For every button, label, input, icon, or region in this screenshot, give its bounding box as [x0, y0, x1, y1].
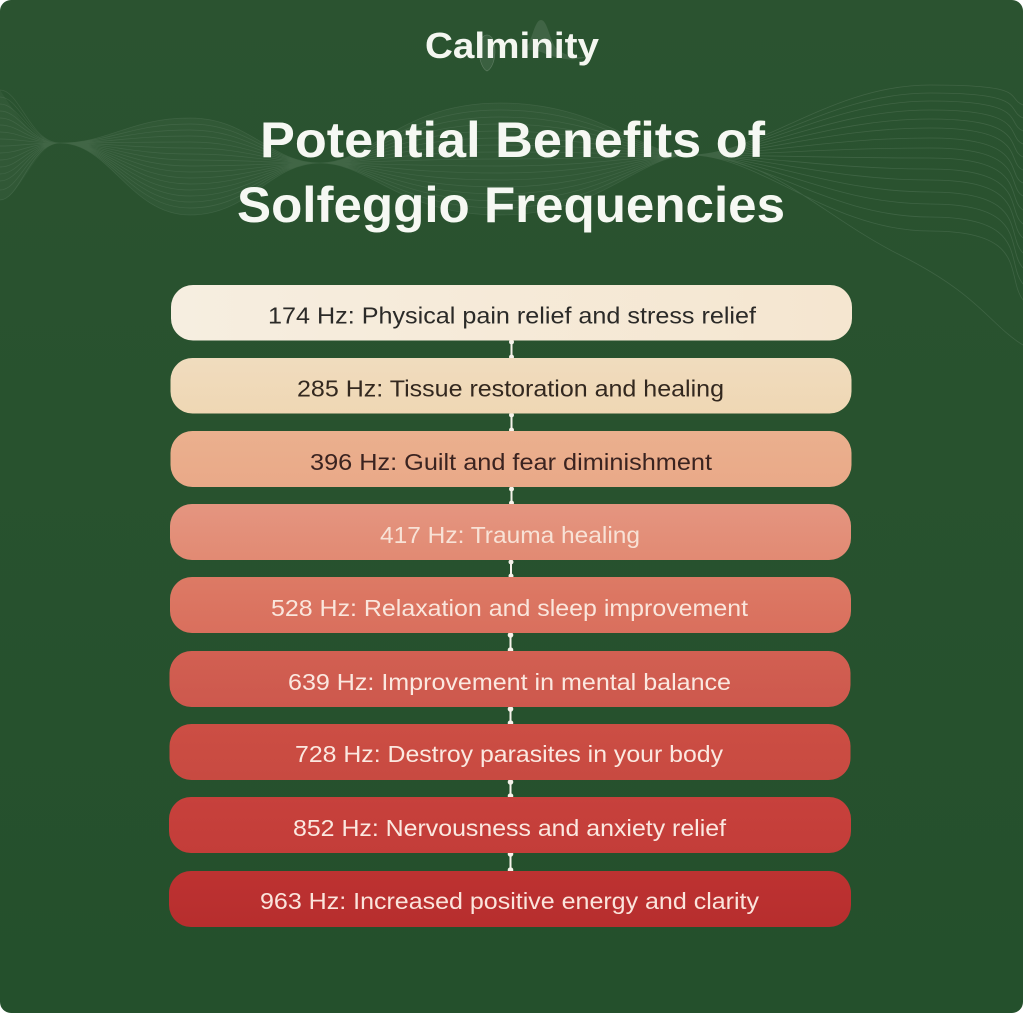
row: 174 Hz	[171, 285, 852, 340]
row: 528 Hz: 528 Hz: Relaxation and sleep improvement	[271, 595, 749, 621]
logo wave mark	[479, 20, 590, 71]
row: 639 Hz	[170, 651, 850, 707]
row: 728 Hz	[170, 724, 850, 780]
row: 285 Hz	[170, 358, 852, 414]
row: 285 Hz: 285 Hz: Tissue restoration and healing	[297, 376, 724, 402]
row: 396 Hz: 396 Hz: Guilt and fear diminishment	[310, 449, 713, 475]
row: 852 Hz: 852 Hz: Nervousness and anxiety relief	[293, 815, 727, 841]
row: 396 Hz	[170, 431, 852, 487]
wave pattern: left and centre ribbons	[0, 90, 690, 215]
row: 852 Hz	[169, 797, 851, 853]
row: 528 Hz	[170, 577, 851, 633]
row: 963 Hz: 963 Hz: Increased positive energy and clarity	[260, 888, 760, 914]
title: Solfeggio Frequencies	[237, 177, 785, 233]
row: 417 Hz	[170, 504, 851, 560]
title: Potential Benefits of	[260, 112, 765, 168]
wave pattern: right ribbon	[690, 85, 1023, 345]
row: 174 Hz: 174 Hz: Physical pain relief and stress relief	[268, 302, 757, 328]
connector line between rows	[508, 340, 514, 873]
row: 728 Hz: 728 Hz: Destroy parasites in your body	[295, 741, 724, 767]
logo wordmark: Calminity	[425, 25, 599, 66]
title	[237, 112, 785, 233]
row: 963 Hz	[169, 871, 851, 927]
row: 417 Hz: 417 Hz: Trauma healing	[380, 522, 640, 548]
row: 639 Hz: 639 Hz: Improvement in mental balance	[288, 669, 731, 695]
